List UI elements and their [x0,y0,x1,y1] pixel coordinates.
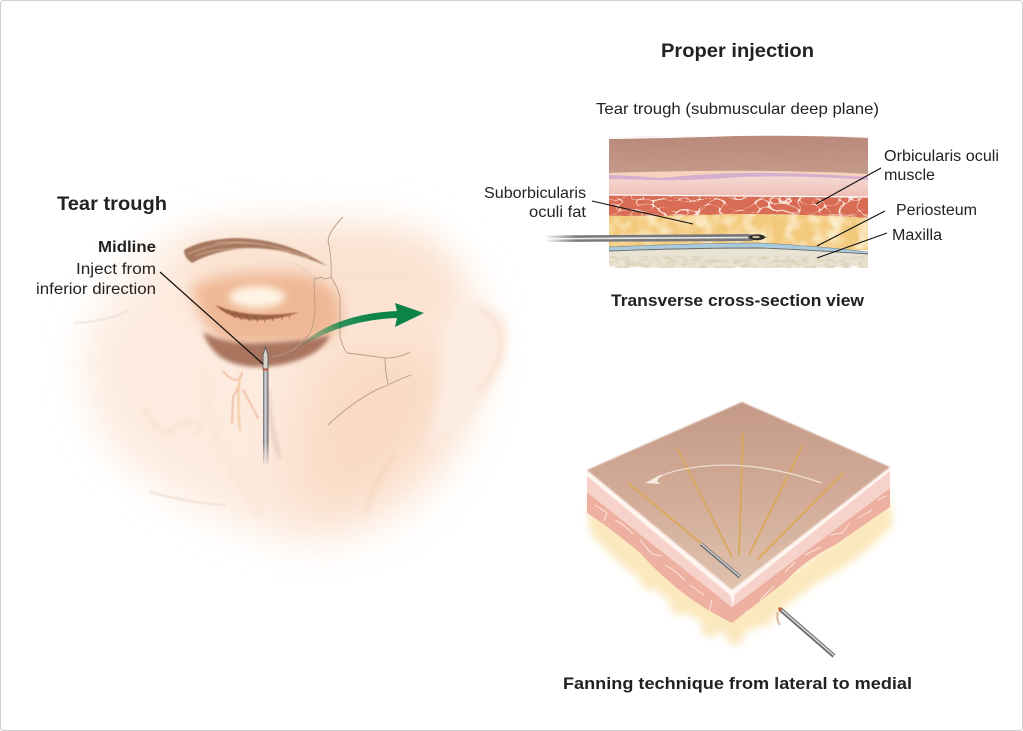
label: suborbicularis oculi fat: Suborbicularis [484,185,586,202]
label: midline injection: inferior direction [36,281,156,298]
label: orbicularis oculi muscle: muscle [884,167,935,184]
layer: muscle [587,488,890,623]
eyelid highlight [229,286,285,308]
label: suborbicularis oculi fat: oculi fat [529,204,587,221]
leader line: periosteum [817,211,885,246]
upper eye shading [192,272,342,345]
fanning track 4 [749,445,803,555]
leader line: fat [592,201,693,224]
external needle [777,607,834,656]
fanning track 1 [628,483,702,544]
inserted needle [701,544,740,577]
tear trough shadow [203,332,330,367]
layer: muscle [609,194,868,220]
label: suborbicularis oculi fat [484,185,587,221]
layer: lilac band [609,173,868,180]
needle shadow [268,390,280,458]
layer: fat [609,214,868,250]
layer: bright edge [587,467,890,607]
label: orbicularis oculi muscle [884,148,999,184]
layer: skin [609,136,868,176]
fanning track 3 [739,433,743,555]
caption: fanning technique: Fanning technique from lateral to medial [563,674,912,693]
heading: proper injection: Proper injection [661,40,814,62]
label: orbicularis oculi muscle: Orbicularis oculi [884,148,999,165]
label: midline injection [36,239,156,298]
leader line: midline [160,272,263,364]
layer: skin surface [587,402,890,590]
label: midline injection: Midline [98,239,156,256]
subheading: tear trough plane: Tear trough (submuscular deep plane) [596,101,879,118]
ear [425,302,508,445]
eyebrow [184,238,327,266]
direction arc arrow [645,465,822,484]
illustration: face with tear trough [75,217,508,538]
heading: tear trough: Tear trough [57,193,167,215]
label: midline injection: Inject from [76,261,156,278]
eyelashes [215,305,300,322]
fanning skin block [587,402,893,656]
fanning track 5 [757,473,843,560]
nerve branches [273,217,411,425]
caption: transverse cross-section: Transverse cross-section view [611,291,865,310]
angular vessel [223,371,258,430]
layer: pink tissue [609,176,868,197]
label: maxilla: Maxilla [892,227,942,244]
leader line: muscle [816,168,881,204]
layer: fat [587,500,893,645]
layer: periosteum [609,243,868,254]
fanning track 2 [677,448,732,557]
layer: maxilla [609,248,868,268]
label: periosteum: Periosteum [896,202,977,219]
leader line: maxilla [817,233,887,258]
needle [262,347,270,466]
layer: dermis [587,467,890,607]
green arrow [294,303,424,351]
layer: dermis border [609,171,868,180]
cross-section needle [546,233,768,244]
cross-section diagram [609,136,868,268]
nose and mouth contours [75,311,395,515]
face skin [85,220,482,538]
